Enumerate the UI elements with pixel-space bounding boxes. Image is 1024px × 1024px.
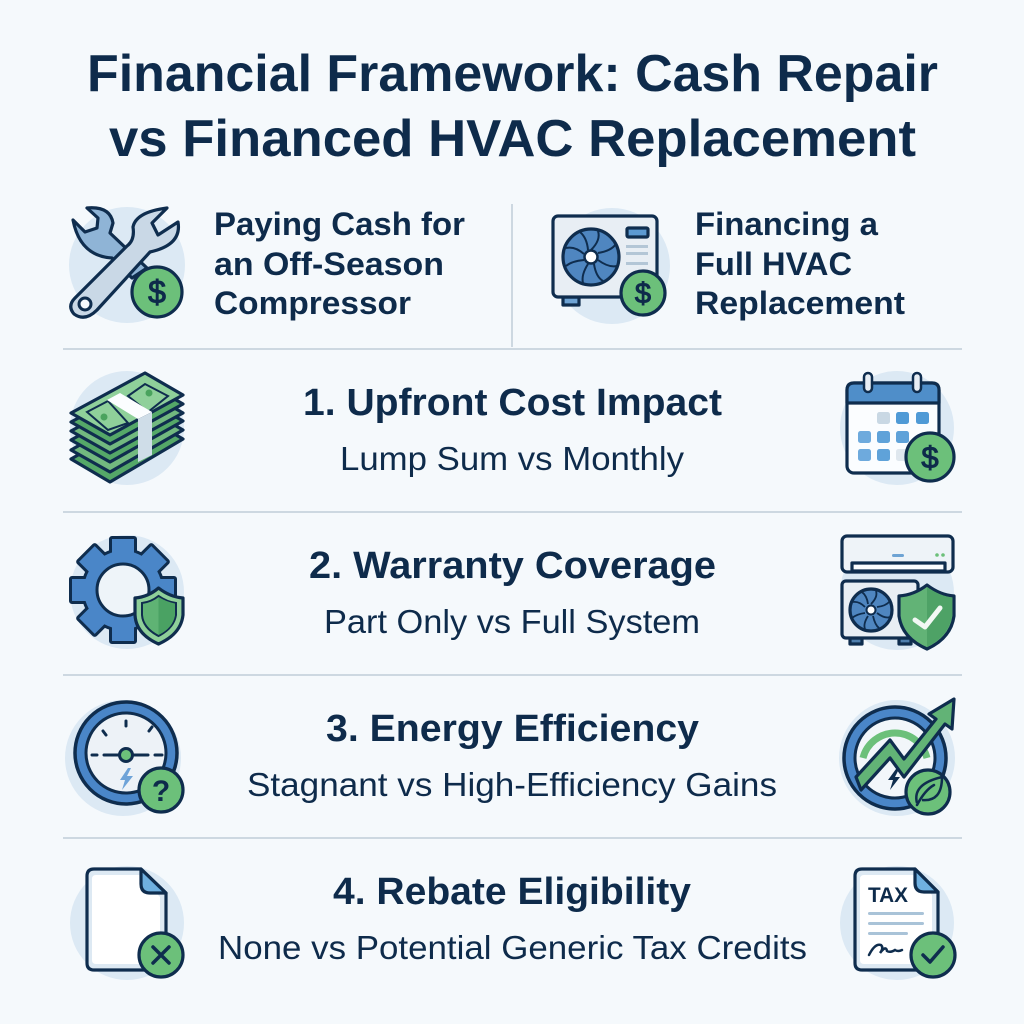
row 4 heading and comparison: 4. Rebate Eligibility bbox=[333, 871, 691, 913]
heading: financed replacement option: Replacement bbox=[695, 285, 905, 321]
heading: financed replacement option bbox=[695, 206, 905, 321]
icon: crossed wrenches with dollar coin: $ bbox=[148, 274, 166, 310]
row 2 heading and comparison: Part Only vs Full System bbox=[324, 603, 700, 640]
icon: gauge with rising arrow and leaf bbox=[839, 699, 955, 816]
row 3 heading and comparison: 3. Energy Efficiency bbox=[326, 708, 699, 750]
icon: calendar with dollar coin bbox=[840, 371, 954, 485]
title bbox=[87, 45, 938, 168]
icon: stack of cash bbox=[70, 371, 184, 485]
row 1 heading and comparison bbox=[303, 382, 722, 477]
heading: cash repair option bbox=[214, 206, 465, 321]
icon: tax document with check bbox=[840, 866, 955, 980]
heading: financed replacement option: Financing a bbox=[695, 206, 878, 242]
row 3 heading and comparison: Stagnant vs High-Efficiency Gains bbox=[247, 766, 777, 803]
icon: crossed wrenches with dollar coin bbox=[69, 207, 185, 323]
row 1 heading and comparison: 1. Upfront Cost Impact bbox=[303, 382, 722, 424]
heading: cash repair option: Compressor bbox=[214, 285, 411, 321]
row 2 heading and comparison: 2. Warranty Coverage bbox=[309, 545, 716, 587]
heading: cash repair option: Paying Cash for bbox=[214, 206, 465, 242]
icon: calendar with dollar coin: $ bbox=[921, 440, 939, 475]
icon: AC units with shield bbox=[840, 536, 954, 650]
row 2 heading and comparison bbox=[309, 545, 716, 640]
row 1 heading and comparison: Lump Sum vs Monthly bbox=[340, 440, 685, 477]
heading: cash repair option: an Off-Season bbox=[214, 246, 444, 282]
heading: financed replacement option: Full HVAC bbox=[695, 246, 852, 282]
icon: gauge with question mark bbox=[65, 700, 183, 816]
icon: outdoor HVAC unit with dollar coin bbox=[553, 208, 670, 324]
icon: tax document with check: TAX bbox=[868, 884, 908, 907]
icon: gauge with question mark: ? bbox=[152, 775, 170, 808]
title: vs Financed HVAC Replacement bbox=[109, 110, 916, 168]
icon: outdoor HVAC unit with dollar coin: $ bbox=[635, 278, 651, 310]
row 3 heading and comparison bbox=[247, 708, 777, 803]
row 4 heading and comparison: None vs Potential Generic Tax Credits bbox=[218, 929, 807, 966]
title: Financial Framework: Cash Repair bbox=[87, 45, 938, 103]
icon: blank document with X bbox=[70, 866, 184, 980]
row 4 heading and comparison bbox=[218, 871, 807, 966]
icon: gear with shield bbox=[70, 535, 184, 649]
